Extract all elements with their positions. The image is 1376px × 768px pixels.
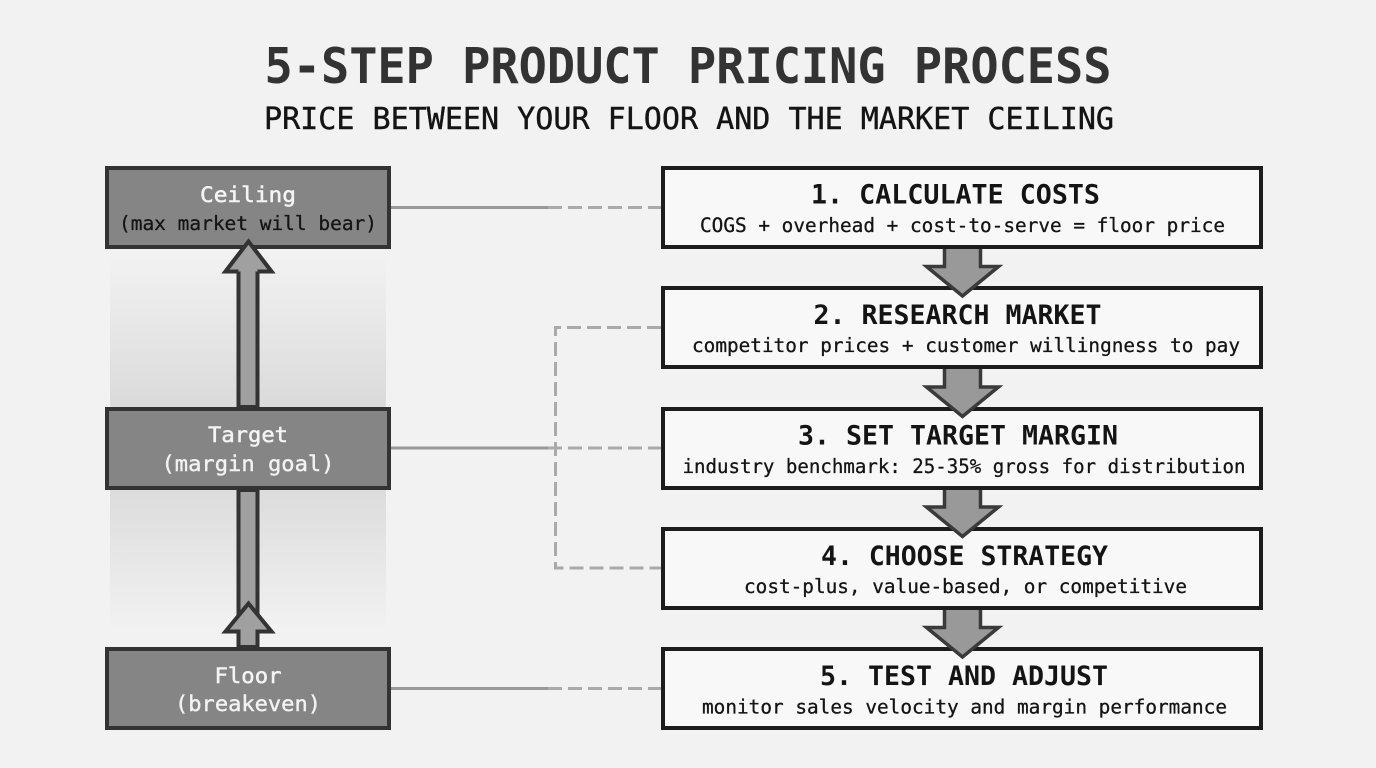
panel: step 1: 1. CALCULATE COSTS xyxy=(811,180,1100,210)
panel: step 4: 4. CHOOSE STRATEGY xyxy=(821,541,1108,572)
panel: target: (margin goal) xyxy=(162,452,334,476)
panel: step 2 xyxy=(663,288,1261,367)
panel: step 4: cost-plus, value-based, or competitive xyxy=(744,575,1187,598)
panel: ceiling xyxy=(107,168,389,247)
panel: ceiling: (max market will bear) xyxy=(119,212,377,235)
connector: ceiling to step 1 xyxy=(391,206,661,209)
panel: step 5 xyxy=(663,649,1261,728)
panel: step 2: 2. RESEARCH MARKET xyxy=(814,300,1102,331)
arrow: step 2 to step 3 xyxy=(926,369,998,416)
panel: step 1 xyxy=(663,168,1261,247)
arrow: step 4 to step 5 xyxy=(926,610,998,657)
panel: step 2: competitor prices + customer willingness to pay xyxy=(692,334,1240,357)
arrow: step 3 to step 4 xyxy=(926,490,998,536)
panel: target xyxy=(107,409,389,488)
connector: step 2 to step 4 xyxy=(556,328,661,568)
arrow head overlapping ceiling xyxy=(226,242,272,272)
subtitle: PRICE BETWEEN YOUR FLOOR AND THE MARKET CEILING xyxy=(264,102,1114,137)
panel: step 3 xyxy=(663,409,1261,488)
gradient band: ceiling to target xyxy=(110,255,386,407)
connector: target to step 3 xyxy=(391,446,661,450)
connector: floor to step 5 xyxy=(391,687,661,690)
panel: step 3: 3. SET TARGET MARGIN xyxy=(798,420,1118,452)
panel: step 1: COGS + overhead + cost-to-serve = floor price xyxy=(700,214,1225,237)
gradient band: target to floor xyxy=(110,490,386,626)
arrow: target up to ceiling xyxy=(226,242,272,407)
panel: floor xyxy=(107,649,389,728)
panel: step 4 xyxy=(663,529,1261,608)
panel: step 3: industry benchmark: 25-35% gross for distribution xyxy=(682,455,1246,478)
panel: floor: Floor xyxy=(214,664,282,688)
panel: step 5: 5. TEST AND ADJUST xyxy=(820,661,1108,692)
title: 5-STEP PRODUCT PRICING PROCESS xyxy=(264,38,1112,95)
arrow: floor up to target shaft xyxy=(238,490,258,647)
panel: ceiling: Ceiling xyxy=(200,183,296,207)
arrow: floor up head xyxy=(226,604,272,647)
arrow: step 1 to step 2 xyxy=(926,249,998,296)
panel: floor: (breakeven) xyxy=(175,692,321,716)
panel: step 5: monitor sales velocity and margin performance xyxy=(702,696,1227,718)
panel: target: Target xyxy=(208,423,288,447)
